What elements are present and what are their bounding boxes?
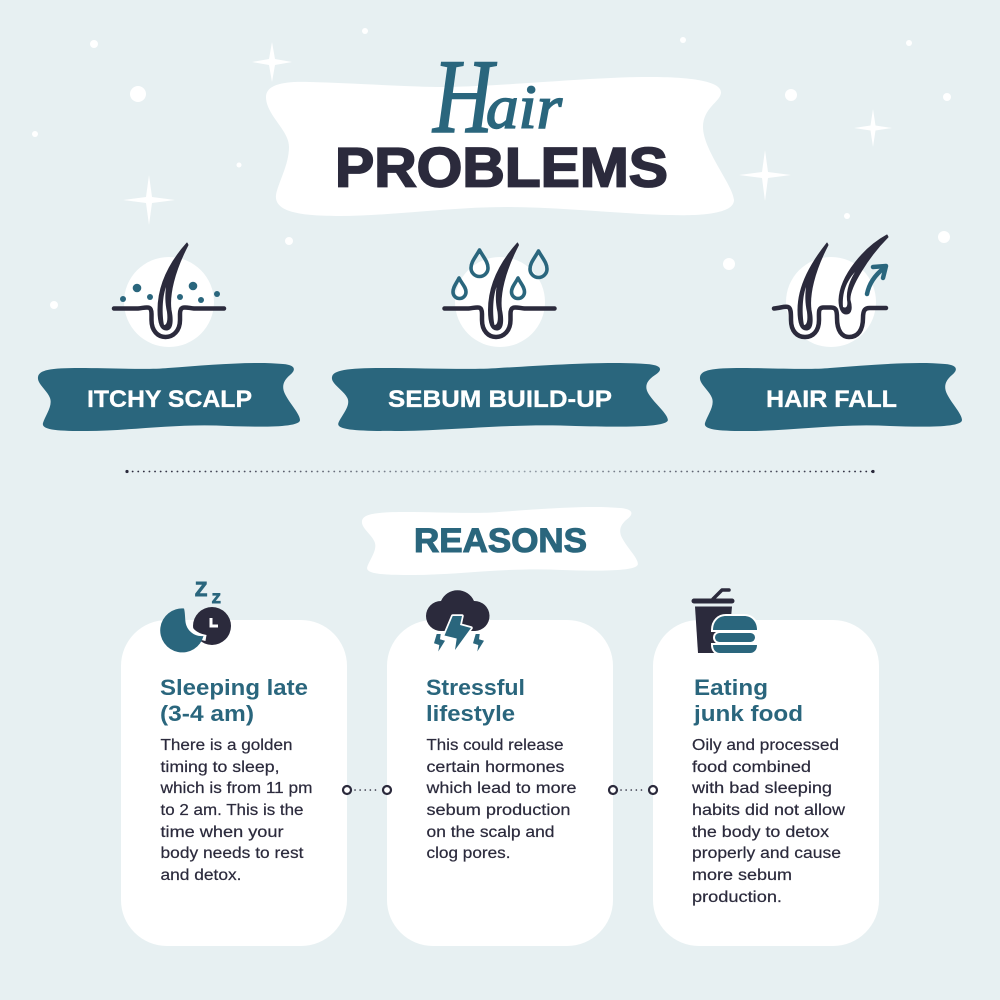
card: stressful lifestyle: This could release bbox=[426, 737, 564, 754]
card: stressful lifestyle: Stressful bbox=[426, 675, 525, 700]
card: stressful lifestyle bbox=[387, 590, 613, 946]
connector: first to second card bbox=[343, 786, 391, 794]
icon: sebum build-up bbox=[444, 243, 554, 347]
card: sleeping late: There is a golden bbox=[160, 737, 292, 754]
card: eating junk food: Oily and processed bbox=[692, 737, 839, 754]
card: sleeping late bbox=[121, 579, 347, 946]
banner: sebum build-up: SEBUM BUILD-UP bbox=[388, 386, 612, 413]
card: stressful lifestyle: sebum production bbox=[426, 802, 570, 819]
card: eating junk food: Eating bbox=[694, 675, 768, 700]
card: stressful lifestyle: certain hormones bbox=[426, 759, 565, 776]
card: eating junk food: food combined bbox=[692, 759, 811, 776]
card: sleeping late: body needs to rest bbox=[160, 845, 304, 862]
banner: itchy scalp: ITCHY SCALP bbox=[87, 386, 252, 413]
icon: moon and clock: Z bbox=[212, 590, 221, 606]
card: sleeping late: which is from 11 pm bbox=[159, 780, 312, 797]
card: stressful lifestyle: lifestyle bbox=[426, 701, 515, 726]
card: sleeping late: (3-4 am) bbox=[160, 701, 254, 726]
card: stressful lifestyle: on the scalp and bbox=[426, 824, 554, 841]
title script word: H bbox=[431, 38, 497, 155]
card: sleeping late: to 2 am. This is the bbox=[160, 802, 304, 819]
heading: reasons bbox=[362, 507, 638, 575]
card: eating junk food: more sebum bbox=[692, 867, 792, 884]
icon: itchy scalp bbox=[114, 243, 224, 347]
card: eating junk food: properly and cause bbox=[692, 845, 841, 862]
icon: hair fall bbox=[774, 235, 888, 347]
heading: reasons: REASONS bbox=[414, 522, 587, 560]
card: eating junk food bbox=[653, 590, 879, 946]
card: stressful lifestyle: which lead to more bbox=[425, 780, 576, 797]
card: sleeping late: timing to sleep, bbox=[160, 759, 280, 776]
title bold word: PROBLEMS bbox=[335, 136, 668, 198]
banner: itchy scalp bbox=[38, 363, 300, 431]
card: eating junk food: habits did not allow bbox=[692, 802, 846, 819]
card: sleeping late: time when your bbox=[160, 824, 284, 841]
banner: hair fall bbox=[700, 363, 962, 431]
title banner blob bbox=[266, 77, 734, 216]
card: eating junk food: production. bbox=[692, 889, 782, 906]
card: sleeping late: Sleeping late bbox=[160, 675, 308, 700]
card: eating junk food: the body to detox bbox=[692, 824, 829, 841]
connector: second to third card bbox=[609, 786, 657, 794]
banner: hair fall: HAIR FALL bbox=[766, 386, 897, 413]
icon: moon and clock: Z bbox=[195, 579, 207, 601]
card: stressful lifestyle: clog pores. bbox=[426, 845, 510, 862]
icon: storm cloud bbox=[426, 590, 490, 652]
card: sleeping late: and detox. bbox=[160, 867, 242, 884]
banner: sebum build-up bbox=[332, 363, 668, 431]
title script word: air bbox=[486, 74, 563, 142]
icon: moon and clock bbox=[160, 579, 231, 652]
title bbox=[266, 38, 734, 216]
icon: soda and burger bbox=[694, 590, 757, 653]
background stars and dots bbox=[32, 28, 951, 309]
card: eating junk food: junk food bbox=[693, 701, 803, 726]
card: eating junk food: with bad sleeping bbox=[691, 780, 832, 797]
